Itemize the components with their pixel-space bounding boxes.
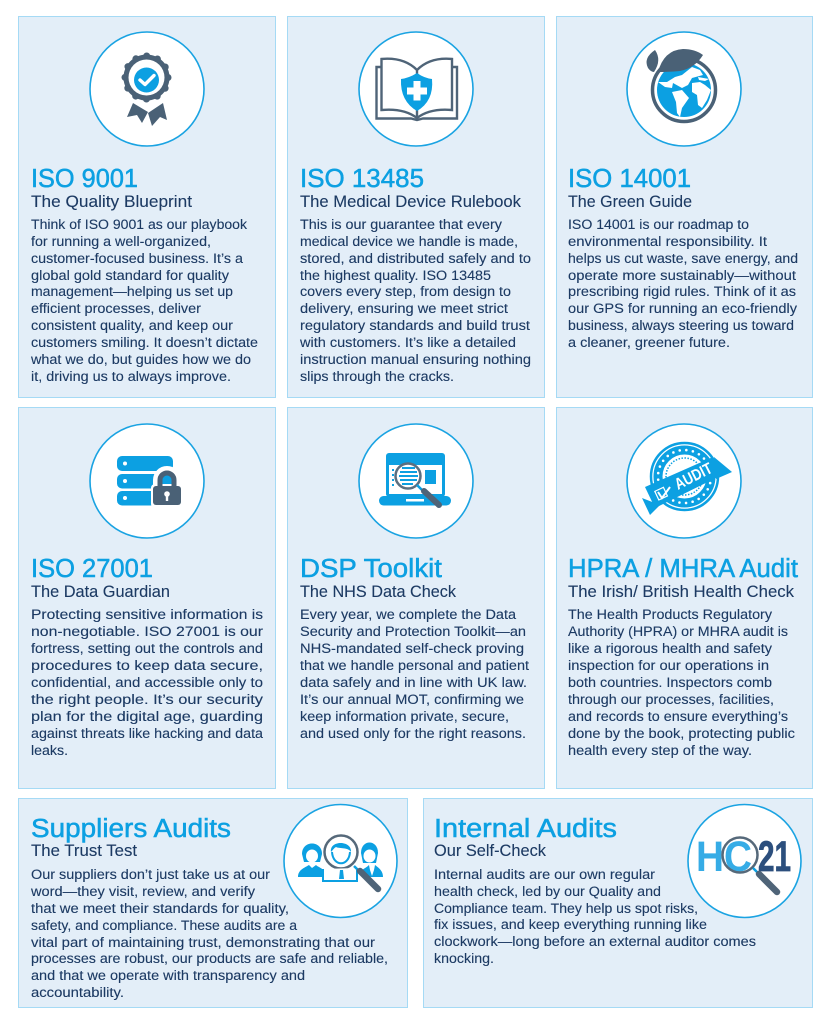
icon: globe with leaves <box>627 32 741 146</box>
body text: it, driving us to always improve. <box>31 369 231 385</box>
body text: medical device we handle is made, <box>300 234 518 250</box>
body text: accountability. <box>31 985 124 1001</box>
body text: customers smiling. It doesn’t dictate <box>31 335 258 351</box>
body text: with customers. It’s like a detailed <box>299 335 516 351</box>
body text: Our suppliers don’t just take us at our <box>31 867 270 883</box>
body text: non-negotiable. ISO 27001 is our <box>31 624 263 640</box>
body text: safety, and compliance. These audits are a <box>31 918 297 934</box>
panel: ISO 9001 <box>18 16 276 398</box>
body text: the right people. It’s our security <box>31 692 264 708</box>
body text: business, always steering us toward <box>568 318 794 334</box>
body text: data safely and in line with UK law. <box>300 675 527 691</box>
body text: and used only for the right reasons. <box>300 726 526 742</box>
body text: ISO 14001 is our roadmap to <box>568 217 749 233</box>
body text: like a rigorous health and safety <box>568 641 773 657</box>
body text: instruction manual ensuring nothing <box>300 352 531 368</box>
icon: quality rosette <box>90 32 204 146</box>
icon: HC21 logo with magnifier <box>688 804 801 918</box>
body text: environmental responsibility. It <box>568 234 767 250</box>
body text: procedures to keep data secure, <box>31 658 263 674</box>
body text <box>299 217 531 385</box>
body text: a cleaner, greener future. <box>568 335 730 351</box>
heading: Internal Audits: Internal Audits <box>434 815 617 843</box>
body text: the highest quality. ISO 13485 <box>300 268 491 284</box>
body text <box>30 217 258 385</box>
body text: fix issues, and keep everything running like <box>434 917 707 933</box>
icon: server with padlock <box>90 424 204 538</box>
body text: done by the book, protecting public <box>568 726 795 742</box>
body text: vital part of maintaining trust, demonstrating that our <box>31 935 375 951</box>
body text <box>568 217 798 351</box>
subheading: The Green Guide <box>568 193 692 211</box>
panel: HPRA / MHRA Audit <box>556 408 812 788</box>
body text: Every year, we complete the Data <box>300 607 516 623</box>
heading: DSP Toolkit: DSP Toolkit <box>300 555 442 583</box>
body text: efficient processes, deliver <box>31 301 201 317</box>
body text: NHS-mandated self-check proving <box>300 641 524 657</box>
body text: keep information private, secure, <box>300 709 509 725</box>
body text <box>31 607 264 759</box>
subheading: The Data Guardian <box>31 583 170 601</box>
panel: ISO 14001 <box>556 16 812 398</box>
heading: HPRA / MHRA Audit: HPRA / MHRA Audit <box>568 555 798 583</box>
body text: Think of ISO 9001 as our playbook <box>31 217 248 233</box>
body text: consistent quality, and keep our <box>31 318 233 334</box>
heading: ISO 9001: ISO 9001 <box>31 165 138 193</box>
icon: audit stamp <box>627 424 741 538</box>
body text: Internal audits are our own regular <box>434 867 655 883</box>
body text <box>300 607 529 742</box>
body text: that we handle personal and patient <box>300 658 529 674</box>
body text: that we meet their standards for quality, <box>31 901 289 917</box>
body text: The Health Products Regulatory <box>568 607 773 623</box>
body text <box>568 607 795 759</box>
body text: delivery, ensuring we meet strict <box>300 301 508 317</box>
body text: health check, led by our Quality and <box>434 884 661 900</box>
body text: both countries. Inspectors comb <box>568 675 772 691</box>
body text: plan for the digital age, guarding <box>31 709 263 725</box>
panel: DSP Toolkit <box>288 408 544 788</box>
panel: ISO 27001 <box>18 408 276 788</box>
body text: regulatory standards and build trust <box>300 318 530 334</box>
panel: Internal Audits <box>424 798 812 1008</box>
body text: and records to ensure everything’s <box>568 709 788 725</box>
body text: Security and Protection Toolkit—an <box>300 624 526 640</box>
subheading: The Quality Blueprint <box>31 193 193 211</box>
icon: book with shield <box>359 32 473 146</box>
body text: against threats like hacking and data <box>31 726 263 742</box>
body text: It’s our annual MOT, confirming we <box>300 692 524 708</box>
body text: helps us cut waste, save energy, and <box>568 251 798 267</box>
body text <box>30 867 388 1001</box>
heading: ISO 13485: ISO 13485 <box>300 165 424 193</box>
body text: through our processes, facilities, <box>568 692 774 708</box>
subheading: The Medical Device Rulebook <box>300 193 522 211</box>
icon: people with magnifier <box>284 804 397 918</box>
body text: for running a well-organized, <box>31 234 211 250</box>
panel: ISO 13485 <box>288 16 544 398</box>
icon: laptop with magnifier <box>359 424 473 538</box>
body text: This is our guarantee that every <box>300 217 503 233</box>
body text: our GPS for running an eco-friendly <box>568 301 798 317</box>
body text: what we do, but guides how we do <box>30 352 251 368</box>
body text: knocking. <box>434 951 494 967</box>
body text: management—helping us set up <box>31 284 233 300</box>
body text: confidential, and accessible only to <box>31 675 263 691</box>
body text: processes are robust, our products are safe and reliable, <box>31 951 388 967</box>
body text: customer-focused business. It’s a <box>31 251 243 267</box>
subheading: Our Self-Check <box>434 842 547 860</box>
subheading: The Irish/ British Health Check <box>568 583 795 601</box>
body text: clockwork—long before an external auditor comes <box>434 934 756 950</box>
body text: Compliance team. They help us spot risks, <box>434 901 698 917</box>
body text: Authority (HPRA) or MHRA audit is <box>568 624 788 640</box>
body text: covers every step, from design to <box>300 284 511 300</box>
heading: Suppliers Audits: Suppliers Audits <box>31 815 231 843</box>
subheading: The Trust Test <box>31 842 138 860</box>
panel: Suppliers Audits <box>18 798 408 1008</box>
body text: health every step of the way. <box>568 743 752 759</box>
body text: global gold standard for quality <box>31 268 230 284</box>
icon: HC21 logo with magnifier: HC <box>696 833 752 881</box>
body text: inspection for our operations in <box>568 658 769 674</box>
heading: ISO 14001: ISO 14001 <box>568 165 691 193</box>
heading: ISO 27001: ISO 27001 <box>31 555 153 583</box>
body text: leaks. <box>31 743 68 759</box>
body text: word—they visit, review, and verify <box>30 884 256 900</box>
icon: HC21 logo with magnifier: 21 <box>758 833 791 881</box>
body text <box>434 867 756 967</box>
body text: operate more sustainably—without <box>568 268 796 284</box>
subheading: The NHS Data Check <box>300 583 457 601</box>
body text: Protecting sensitive information is <box>31 607 263 623</box>
body text: slips through the cracks. <box>300 369 454 385</box>
body text: fortress, setting out the controls and <box>31 641 263 657</box>
body text: stored, and distributed safely and to <box>300 251 531 267</box>
body text: and that we operate with transparency and <box>31 968 305 984</box>
icon: audit stamp: AUDIT <box>672 460 716 494</box>
body text: prescribing rigid rules. Think of it as <box>568 284 796 300</box>
